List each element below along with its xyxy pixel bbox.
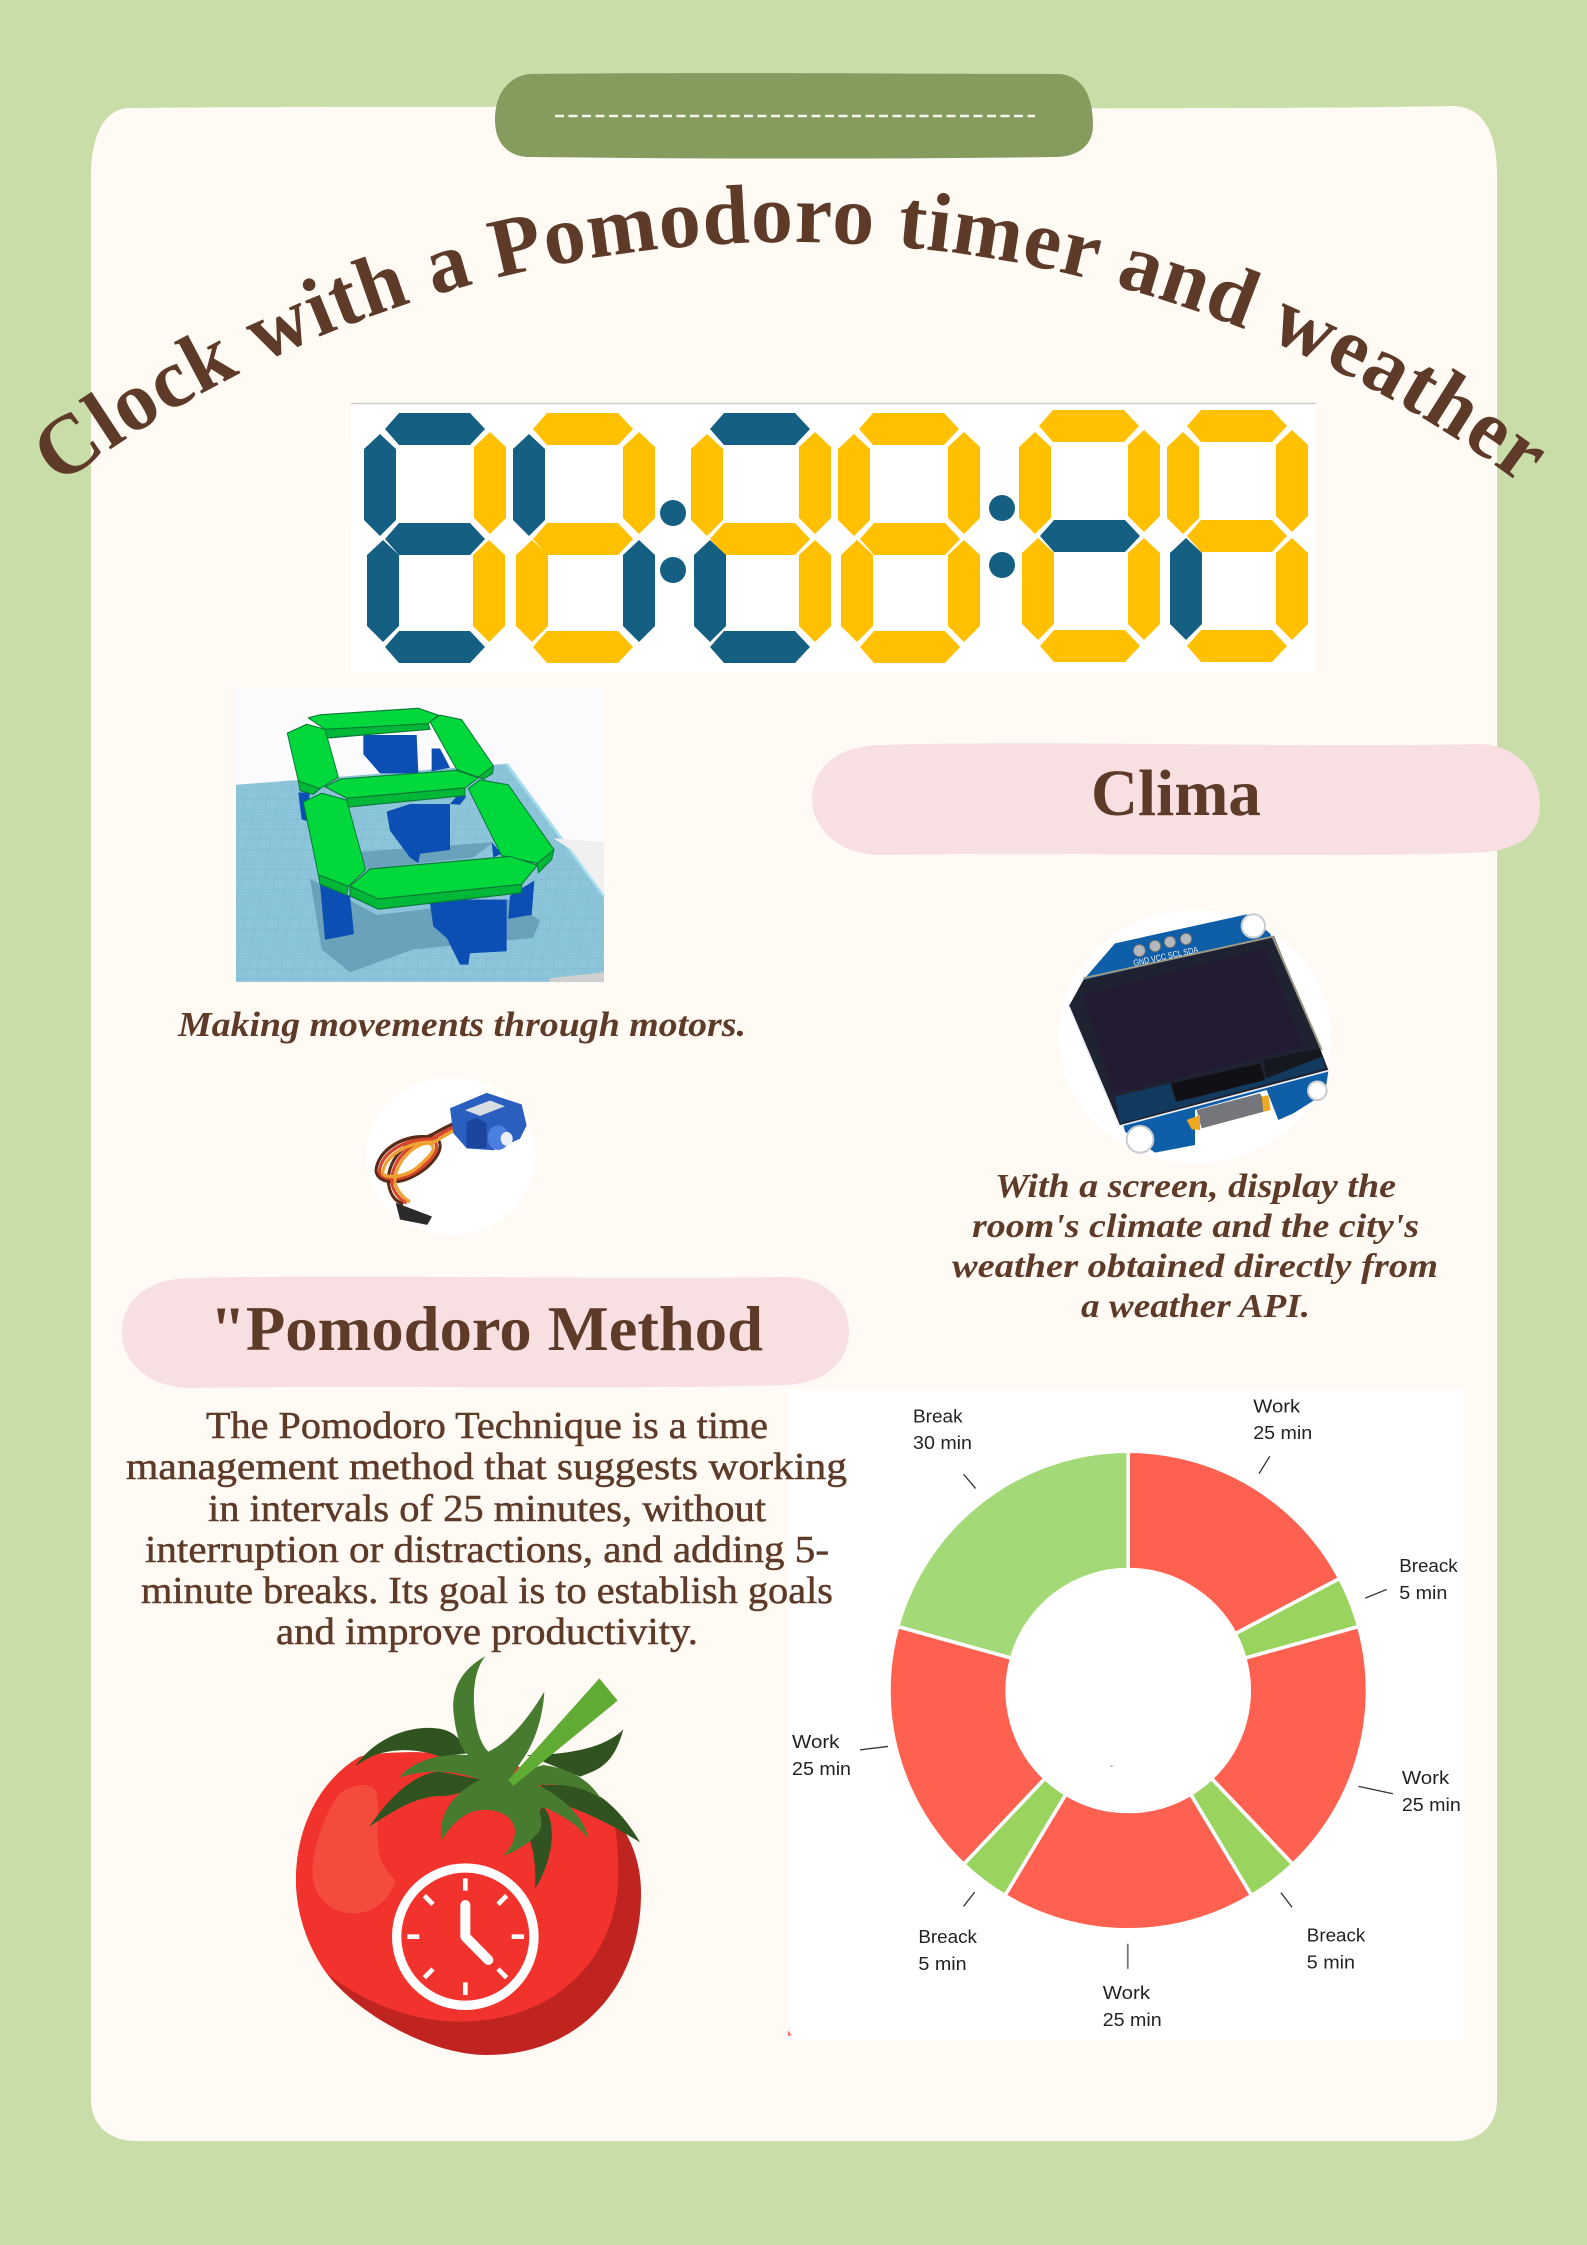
text block: climate description: weather obtained directly from [952, 1248, 1438, 1285]
ground shadows [310, 879, 540, 972]
text block: Pomodoro description: interruption or distractions, and adding 5- [145, 1529, 829, 1571]
tomato body [296, 1752, 641, 2055]
text block: Pomodoro description: The Pomodoro Technique is a time [206, 1405, 768, 1447]
leader lines and labels: 5 min [1307, 1952, 1355, 1972]
leader lines and labels: 25 min [792, 1758, 851, 1779]
leader lines and labels: Work [1402, 1767, 1450, 1788]
leader lines and labels: 25 min [1402, 1794, 1461, 1815]
tab with dashed line [495, 73, 1093, 158]
leader lines and labels: Work [1253, 1396, 1301, 1416]
chart: Pomodoro donut [788, 1390, 1463, 2040]
blue servos [298, 735, 534, 965]
text block: climate description [952, 1168, 1438, 1325]
digit 1 [364, 413, 506, 663]
digit 6 [1167, 410, 1308, 662]
pill heading: Clima [812, 743, 1540, 855]
image: 3D printed segment digit with servos [236, 687, 604, 982]
title: Clock with a Pomodoro timer and weather [39, 184, 1544, 478]
colon dots [660, 495, 1015, 583]
heading text: Clima: Clima [1091, 757, 1261, 830]
text block: Pomodoro description [126, 1405, 847, 1653]
clock [397, 1868, 534, 2005]
heading text: "Pomodoro Method [210, 1293, 763, 1364]
image: OLED display module [1058, 910, 1332, 1163]
digit 2 [513, 413, 655, 663]
stem [508, 1678, 618, 1786]
chart background [788, 1390, 1463, 2040]
leader lines and labels: Breack [1399, 1555, 1458, 1576]
donut slices [889, 1451, 1367, 1930]
seven segment clock display [351, 403, 1316, 672]
leader lines and labels: 25 min [1103, 2009, 1162, 2030]
icon: tomato with clock [296, 1656, 641, 2055]
green segments [287, 708, 554, 909]
text block: Pomodoro description: management method that suggests working [126, 1446, 847, 1488]
calyx [399, 1656, 602, 1856]
leader lines and labels: Breack [918, 1926, 978, 1947]
leader lines and labels: Work [792, 1731, 840, 1752]
leader lines and labels: Breack [1307, 1925, 1366, 1946]
text block: Pomodoro description: in intervals of 25 minutes, without [208, 1488, 766, 1530]
digit 5 [1019, 410, 1160, 662]
leader lines and labels: 5 min [918, 1953, 967, 1974]
leader lines and labels: 5 min [1399, 1582, 1447, 1603]
dark leaves [355, 1728, 640, 1889]
leader lines and labels: Work [1103, 1983, 1151, 2003]
caption: making movements: Making movements through motors. [177, 1005, 746, 1044]
text block: Pomodoro description: and improve productivity. [276, 1611, 698, 1653]
leader lines and labels [788, 1396, 1461, 2036]
leader lines and labels: 30 min [913, 1432, 972, 1453]
pill heading: Pomodoro Method [122, 1277, 849, 1388]
leader lines and labels: Break [913, 1406, 963, 1426]
digit 4 [838, 413, 980, 663]
icon: micro servo motor [366, 1077, 535, 1235]
digit 3 [691, 413, 831, 663]
text block: climate description: room's climate and the city's [972, 1208, 1419, 1245]
image: OLED display module: GND VCC SCL SDA [1132, 944, 1199, 968]
text block: climate description: With a screen, display the [995, 1168, 1396, 1205]
text block: climate description: a weather API. [1081, 1288, 1310, 1325]
leader lines and labels: 25 min [1253, 1422, 1312, 1443]
text block: Pomodoro description: minute breaks. Its goal is to establish goals [141, 1570, 833, 1612]
